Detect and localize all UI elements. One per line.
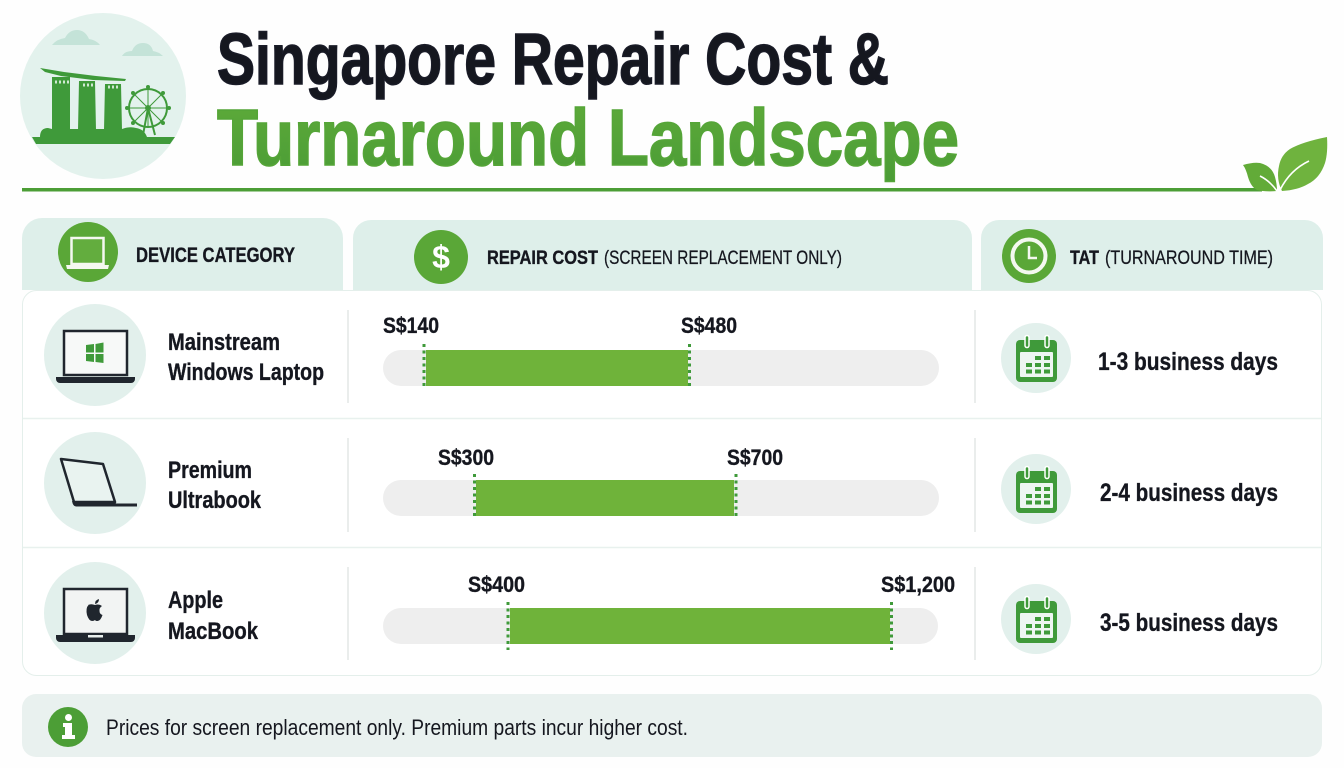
title	[217, 20, 959, 182]
text: 2-4 business days: 2-4 business days	[1100, 479, 1278, 507]
heading: device category: DEVICE CATEGORY	[136, 244, 295, 267]
row: apple macbook	[44, 562, 1278, 664]
text: 3-5 business days: 3-5 business days	[1100, 609, 1278, 637]
bar: S$300 to S$700: S$700	[727, 445, 783, 470]
text: footnote: Prices for screen replacement only. Premium parts incur higher cost.	[106, 715, 688, 740]
bar: S$400 to S$1,200: S$1,200	[881, 572, 955, 597]
icon: info	[48, 707, 88, 747]
icon: macbook	[44, 562, 146, 664]
bar: S$300 to S$700: S$300	[438, 445, 494, 470]
panel: table card	[22, 290, 1322, 676]
label: apple macbook	[168, 587, 259, 645]
label: premium ultrabook: Ultrabook	[168, 487, 262, 514]
label: mainstream windows laptop: Mainstream	[168, 329, 280, 356]
bar: S$140 to S$480	[383, 313, 939, 389]
icon: dollar: $	[432, 239, 450, 275]
label: mainstream windows laptop	[168, 329, 324, 386]
text: 1-3 business days: 1-3 business days	[1098, 348, 1278, 376]
bar: S$140 to S$480: S$140	[383, 313, 439, 338]
label: mainstream windows laptop: Windows Laptop	[168, 359, 324, 386]
bar: S$400 to S$1,200	[383, 572, 955, 650]
label: premium ultrabook	[168, 457, 262, 514]
icon: calendar	[1001, 584, 1071, 654]
icon: ultrabook	[44, 432, 146, 534]
icon: clock	[1002, 229, 1056, 283]
panel: column headers	[22, 218, 1323, 290]
heading: repair cost: (SCREEN REPLACEMENT ONLY)	[604, 248, 842, 269]
label: apple macbook: MacBook	[168, 618, 259, 645]
row: premium ultrabook	[44, 432, 1278, 534]
label: apple macbook: Apple	[168, 587, 223, 614]
heading: repair cost	[487, 248, 842, 269]
icon: calendar	[1001, 323, 1071, 393]
title: Turnaround Landscape	[217, 93, 959, 182]
heading: repair cost: REPAIR COST	[487, 248, 598, 269]
panel: footnote	[22, 694, 1322, 757]
icon: dollar	[414, 230, 468, 284]
title: Singapore Repair Cost &	[217, 20, 889, 100]
title divider with leaves	[22, 137, 1327, 192]
heading: turnaround time: (TURNAROUND TIME)	[1105, 248, 1273, 269]
bar: S$140 to S$480: S$480	[681, 313, 737, 338]
icon: laptop header	[58, 222, 118, 282]
row: mainstream windows laptop	[44, 304, 1278, 406]
label: premium ultrabook: Premium	[168, 457, 252, 484]
icon: calendar	[1001, 454, 1071, 524]
heading: turnaround time: TAT	[1070, 248, 1099, 269]
bar: S$300 to S$700	[383, 445, 939, 519]
bar: S$400 to S$1,200: S$400	[468, 572, 525, 597]
icon: Singapore skyline	[20, 13, 186, 179]
icon: windows laptop	[44, 304, 146, 406]
